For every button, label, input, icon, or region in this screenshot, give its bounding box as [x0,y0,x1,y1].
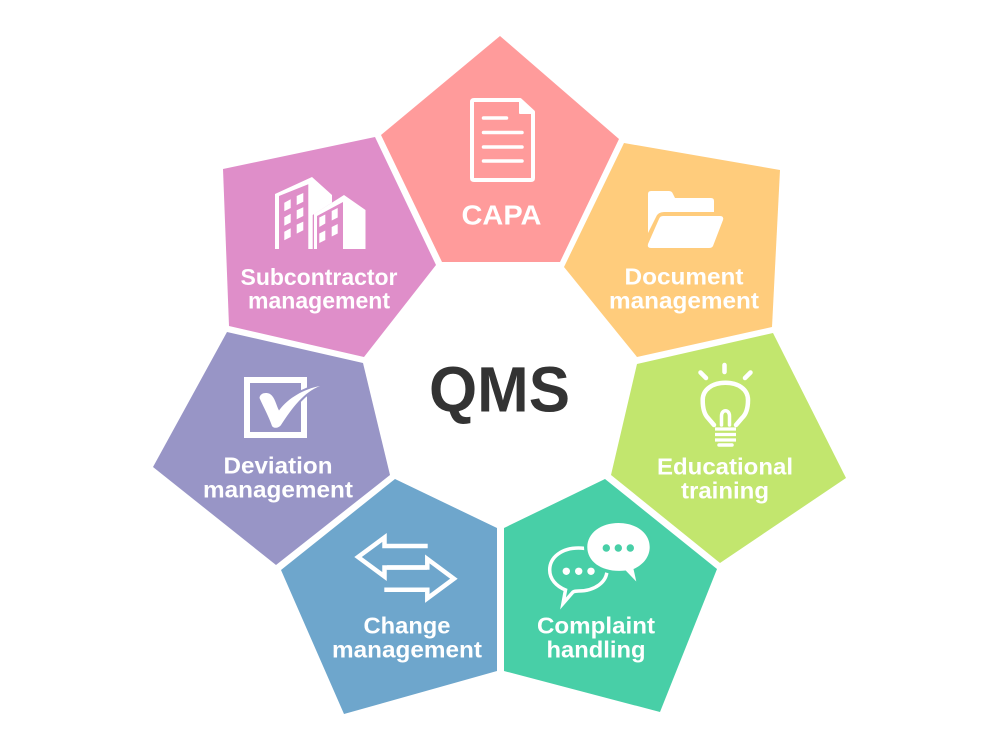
panel: Deviation management [153,332,390,565]
icon: checkbox [247,380,320,435]
panel: Subcontractor management: management [248,288,390,314]
panel: Educational training [611,333,846,563]
panel: Document management: management [609,288,759,314]
icon: folder [648,191,723,248]
label: CAPA: CAPA [462,200,542,230]
panel: Document management [564,143,780,357]
icon: speech bubbles [550,520,653,604]
label: Educational training: Educational [657,454,793,480]
icon: exchange arrows [358,538,454,598]
panel: Change management: management [332,636,482,662]
label: Document management: Document [624,264,744,290]
icon: buildings [275,177,366,249]
panel: Change management [281,479,497,714]
icon: light bulb [700,365,750,445]
panel: Complaint handling [504,479,717,712]
panel: Subcontractor management [223,137,436,357]
panel: CAPA [381,36,619,262]
label: Deviation management: Deviation [224,452,332,478]
panel: Complaint handling: handling [546,636,646,662]
label: Complaint handling: Complaint [537,612,655,638]
label: Change management: Change [364,612,450,638]
icon: document [472,100,533,180]
panel: Educational training: training [681,478,769,504]
panel: Deviation management: management [203,476,353,502]
title: QMS: QMS [429,354,570,426]
label: Subcontractor management: Subcontractor [240,264,398,290]
